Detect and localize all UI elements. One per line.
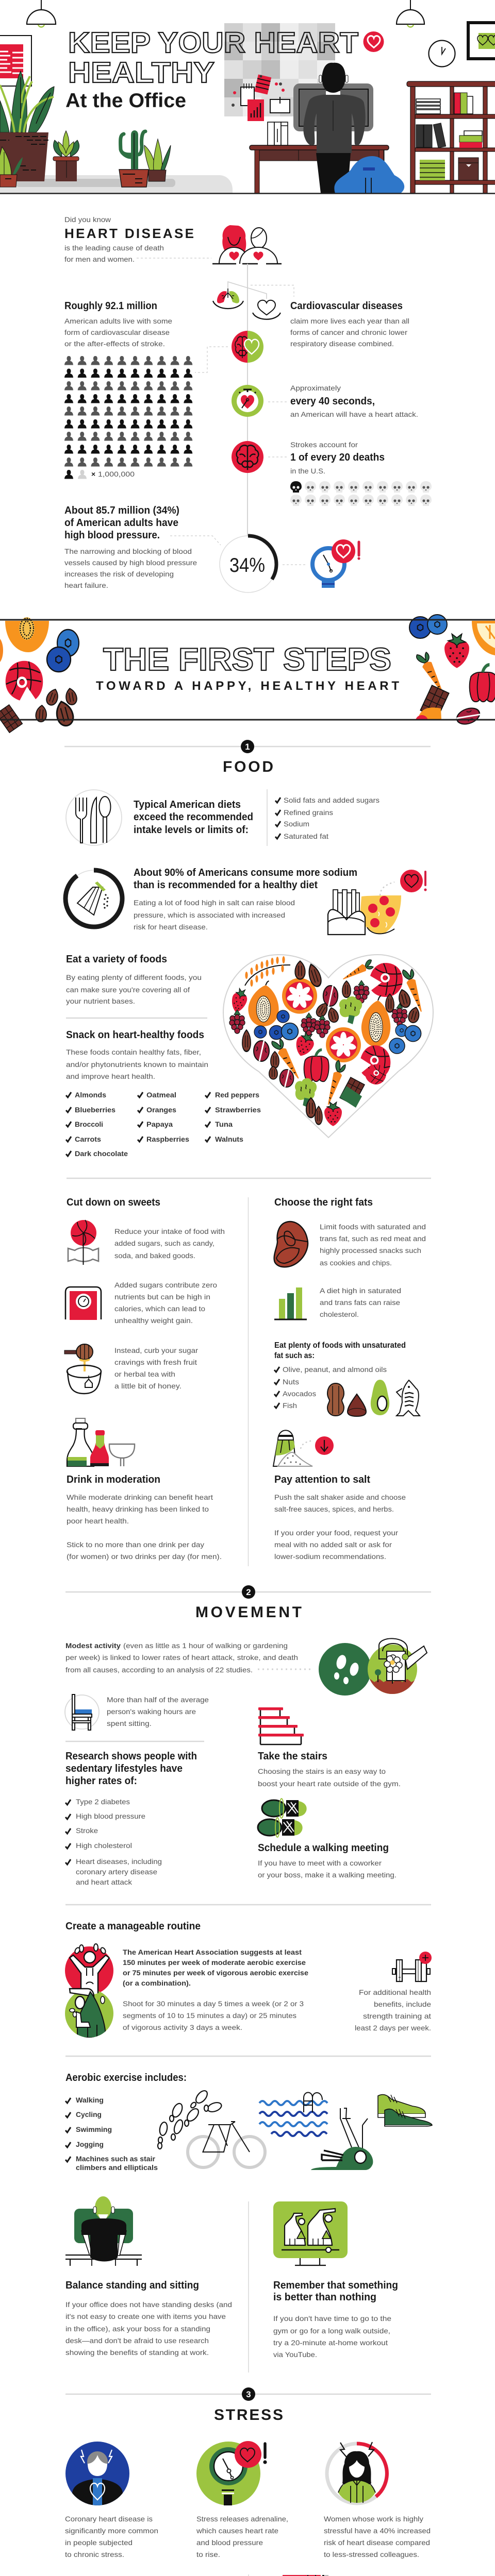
checklist: diet limits: Solid fats and added sugars bbox=[284, 796, 380, 804]
text: coronary bbox=[65, 2515, 158, 2558]
text: cut down on sweets: Cut down on sweets bbox=[67, 1197, 160, 1208]
text: walking meeting: If you have to meet with a coworker bbox=[258, 1859, 382, 1867]
text: something better than nothing: is better than nothing bbox=[273, 2292, 376, 2303]
text: walking meeting: Schedule a walking meeting bbox=[258, 1842, 389, 1854]
text: cholesterol: and trans fats can raise bbox=[320, 1298, 400, 1307]
text: adrenaline bbox=[196, 2515, 288, 2558]
icon: rising bars bbox=[274, 1287, 307, 1319]
text: coronary: in people subjected bbox=[65, 2538, 133, 2547]
text: drink in moderation: Drink in moderation bbox=[67, 1474, 160, 1485]
text: strokes bbox=[290, 440, 385, 475]
icon: running shoes bbox=[258, 1799, 307, 1837]
text: 90% sodium: risk for heart disease. bbox=[134, 923, 208, 931]
text: take the stairs: Choosing the stairs is an easy way to bbox=[258, 1767, 386, 1775]
text: eat a variety bbox=[66, 954, 202, 1005]
icon: sneakers bbox=[378, 2095, 432, 2126]
text: balance standing and sitting: showing the benefits of standing at work. bbox=[65, 2348, 209, 2357]
food illustrations right bbox=[409, 615, 495, 727]
icon: brain and heart circle bbox=[232, 331, 263, 363]
text: reduce intake bbox=[114, 1227, 225, 1260]
icon: salt ring 90% bbox=[65, 870, 122, 927]
checklist: snacks: Blueberries bbox=[75, 1106, 116, 1114]
icon: organ mobile bbox=[213, 282, 280, 319]
chart: 34% ring: 34% bbox=[229, 554, 265, 577]
text: every 40 seconds: Approximately bbox=[290, 384, 341, 392]
icon: couple bbox=[212, 225, 282, 264]
checklist: snacks: Strawberries bbox=[215, 1106, 261, 1114]
checklist: snacks: Oranges bbox=[146, 1106, 176, 1114]
text: strokes: 1 of every 20 deaths bbox=[290, 452, 385, 463]
section header: movement: 2 bbox=[246, 1587, 251, 1597]
checklist: snacks bbox=[66, 1091, 261, 1158]
text: pay attention to salt: Push the salt shaker aside and choose bbox=[274, 1493, 406, 1501]
text: added sugars: unhealthy weight gain. bbox=[114, 1316, 193, 1325]
icon: stressed woman ring bbox=[327, 2442, 387, 2503]
checklist: snacks: Red peppers bbox=[215, 1091, 259, 1099]
text: roughly 92.1 million: form of cardiovascular disease bbox=[64, 328, 170, 336]
text: sitting: person's waking hours are bbox=[107, 1707, 196, 1716]
text: heart association guidance: (or a combination). bbox=[123, 1979, 191, 1987]
text: strength training: For additional health bbox=[359, 1988, 431, 1996]
text: heart association guidance: segments of 10 to 15 minutes a day) or 25 minutes bbox=[123, 2011, 296, 2020]
text: limit foods bbox=[320, 1223, 426, 1267]
checklist: diet limits: Sodium bbox=[284, 820, 309, 828]
checklist: fats bbox=[274, 1365, 387, 1410]
text: every 40 seconds: an American will have a heart attack. bbox=[290, 410, 418, 418]
title bbox=[68, 26, 358, 89]
text: pay attention to salt: lower-sodium recommendations. bbox=[274, 1552, 386, 1561]
banner subtitle: TOWARD A HAPPY, HEALTHY HEART bbox=[96, 679, 399, 693]
text: curb sugar: a little bit of honey. bbox=[114, 1382, 182, 1390]
legend: 1,000,000 people: × bbox=[91, 470, 95, 478]
text: research: Research shows people with bbox=[65, 1751, 197, 1762]
title: HEALTHY bbox=[68, 56, 214, 89]
checklist: aerobic: Cycling bbox=[76, 2110, 102, 2119]
checklist: diet limits bbox=[275, 796, 380, 840]
text: walking meeting bbox=[258, 1842, 397, 1879]
text: drink in moderation: Stick to no more than one drink per day bbox=[67, 1540, 204, 1549]
text: balance standing and sitting: If your office does not have standing desks (and bbox=[65, 2300, 232, 2309]
checklist: risks: Heart diseases, including bbox=[76, 1857, 162, 1866]
large potted plant bbox=[0, 71, 54, 181]
text: 85.7 million: increases the risk of developing bbox=[64, 570, 174, 578]
text: curb sugar: or herbal tea with bbox=[114, 1370, 175, 1378]
checklist: snacks: Dark chocolate bbox=[75, 1149, 128, 1158]
text: something better than nothing: If you don't have time to go to the bbox=[273, 2314, 391, 2323]
text: pay attention to salt: Pay attention to salt bbox=[274, 1474, 370, 1485]
text: limit foods: Limit foods with saturated and bbox=[320, 1223, 426, 1231]
banner: the first steps bbox=[0, 615, 495, 733]
text: added sugars: nutrients but can be high in bbox=[114, 1293, 210, 1301]
text: cardiovascular diseases: respiratory disease combined. bbox=[290, 340, 394, 348]
text: walking meeting: or your boss, make it a walking meeting. bbox=[258, 1871, 397, 1879]
section header: stress: STRESS bbox=[214, 2406, 283, 2424]
icon: swimming pool bbox=[259, 2093, 327, 2136]
text: modest activity: (even as little as 1 hour of walking or gardening bbox=[123, 1641, 288, 1650]
computer monitor bbox=[293, 83, 373, 131]
text: added sugars bbox=[114, 1281, 217, 1325]
food illustrations left bbox=[0, 617, 79, 733]
banner rules bbox=[0, 620, 495, 720]
checklist: fats: Olive, peanut, and almond oils bbox=[283, 1365, 387, 1374]
text: women: risk of heart disease compared bbox=[324, 2538, 430, 2547]
text: pay attention to salt: meal with no added salt or ask for bbox=[274, 1540, 392, 1549]
text: reduce intake: Reduce your intake of food with bbox=[114, 1227, 225, 1235]
text: roughly 92.1 million bbox=[64, 300, 172, 348]
text: women bbox=[324, 2515, 431, 2558]
text: unsaturated fat bbox=[274, 1341, 406, 1360]
text: pay attention to salt bbox=[274, 1474, 406, 1561]
icon: bicycle bbox=[188, 2122, 265, 2167]
wall art left bbox=[0, 36, 31, 86]
text: balance standing and sitting: in the office), ask your boss for a standing bbox=[65, 2325, 210, 2333]
text: heart association guidance: of vigorous activity 3 days a week. bbox=[123, 2023, 242, 2031]
text: reduce intake: soda, and baked goods. bbox=[114, 1251, 195, 1260]
text: something better than nothing: try a 20-minute at-home workout bbox=[273, 2338, 388, 2347]
subtitle: At the Office bbox=[65, 90, 186, 112]
text: coronary: Coronary heart disease is bbox=[65, 2515, 153, 2523]
text: cardiovascular diseases: forms of cancer and chronic lower bbox=[290, 328, 407, 336]
text: adrenaline: Stress releases adrenaline, bbox=[196, 2515, 288, 2523]
text: 85.7 million bbox=[64, 505, 197, 589]
checklist: diet limits: Refined grains bbox=[284, 808, 333, 817]
text: cholesterol bbox=[320, 1286, 401, 1318]
central timeline bbox=[247, 264, 248, 536]
icon: salt shaker bbox=[273, 1430, 334, 1466]
text: strength training: strength training at bbox=[363, 2012, 431, 2020]
text: drink in moderation: (for women) or two drinks per day (for men). bbox=[67, 1552, 222, 1561]
desk bbox=[250, 145, 389, 193]
clock bbox=[429, 40, 455, 67]
checklist: aerobic: Swimming bbox=[76, 2125, 112, 2133]
icon: dumbbell bbox=[392, 1952, 432, 1981]
icon: fries and pizza bbox=[328, 870, 427, 935]
text: sitting bbox=[107, 1696, 209, 1727]
text: balance standing and sitting: it's not easy to create one with items you have bbox=[65, 2312, 226, 2320]
text: eat a variety: By eating plenty of different foods, you bbox=[66, 973, 202, 981]
checklist: risks: coronary artery disease bbox=[76, 1868, 157, 1876]
text: limit foods: as cookies and chips. bbox=[320, 1259, 392, 1267]
icon: scale bbox=[65, 1287, 101, 1320]
text: cardiovascular diseases: Cardiovascular diseases bbox=[290, 300, 403, 312]
icon: footprints circle bbox=[319, 1643, 371, 1696]
checklist: risks: Type 2 diabetes bbox=[76, 1798, 130, 1806]
text: modest activity: Modest activity bbox=[65, 1641, 121, 1650]
text: reduce intake: added sugars, such as candy, bbox=[114, 1239, 214, 1247]
text: adrenaline: which causes heart rate bbox=[196, 2527, 278, 2535]
text: curb sugar: Instead, curb your sugar bbox=[114, 1346, 198, 1354]
text: drink in moderation: While moderate drinking can benefit heart bbox=[67, 1493, 213, 1501]
heading: routine: Create a manageable routine bbox=[65, 1921, 201, 1932]
heading: aerobic: Aerobic exercise includes: bbox=[65, 2072, 187, 2083]
text: curb sugar: cravings with fresh fruit bbox=[114, 1358, 197, 1366]
text: modest activity: from all causes, according to an analysis of 22 studies. bbox=[65, 1666, 253, 1674]
pictogram: skulls bbox=[290, 481, 432, 506]
checklist: snacks: Tuna bbox=[215, 1120, 233, 1128]
icon: cutlery circle bbox=[66, 790, 122, 845]
text: 90% sodium: About 90% of Americans consume more sodium bbox=[134, 867, 357, 878]
text: added sugars: Added sugars contribute zero bbox=[114, 1281, 217, 1289]
checklist: fats: Avocados bbox=[283, 1389, 316, 1398]
text: cardiovascular diseases bbox=[290, 300, 409, 348]
text: heart association guidance: 150 minutes per week of moderate aerobic exercise bbox=[123, 1958, 306, 1967]
text: drink in moderation bbox=[67, 1474, 222, 1561]
text: something better than nothing: Remember that something bbox=[273, 2280, 398, 2291]
text: eat a variety: Eat a variety of foods bbox=[66, 954, 167, 965]
checklist: fats: Nuts bbox=[283, 1378, 299, 1386]
icon: gardening circle bbox=[368, 1638, 428, 1694]
text: 85.7 million: About 85.7 million (34%) bbox=[64, 505, 179, 516]
title: KEEP YOUR HEART bbox=[68, 26, 358, 59]
text: 85.7 million: high blood pressure. bbox=[64, 530, 160, 541]
text: added sugars: calories, which can lead to bbox=[114, 1304, 205, 1313]
text: something better than nothing: gym or go for a long walk outside, bbox=[273, 2327, 390, 2335]
icon: standing at desk bbox=[65, 2196, 142, 2266]
icon: brain circle bbox=[232, 441, 263, 473]
text: take the stairs: Take the stairs bbox=[258, 1751, 327, 1762]
text: typical american diets bbox=[134, 799, 253, 836]
text: snack on heart-healthy foods: and/or phytonutrients known to maintain bbox=[66, 1060, 208, 1069]
text: 85.7 million: The narrowing and blocking of blood bbox=[64, 547, 192, 555]
small plant on stand bbox=[53, 131, 79, 181]
text: 85.7 million: heart failure. bbox=[64, 581, 108, 589]
text: something better than nothing: via YouTube. bbox=[273, 2350, 317, 2359]
checklist: risks: Stroke bbox=[76, 1826, 98, 1835]
text: roughly 92.1 million: Roughly 92.1 million bbox=[64, 300, 157, 312]
text: coronary: to chronic stress. bbox=[65, 2550, 124, 2558]
checklist: risks: and heart attack bbox=[76, 1878, 133, 1886]
person standing at desk bbox=[303, 63, 366, 193]
text: 85.7 million: of American adults have bbox=[64, 517, 178, 529]
text: strokes: in the U.S. bbox=[290, 467, 325, 475]
text: 90% sodium: than is recommended for a healthy diet bbox=[134, 879, 318, 891]
section header: movement bbox=[65, 1585, 431, 1621]
text: pay attention to salt: salt-free sauces, spices, and herbs. bbox=[274, 1505, 394, 1513]
checklist: aerobic bbox=[65, 2096, 158, 2172]
icon: video workout screen bbox=[273, 2201, 348, 2265]
grass plant pot bbox=[144, 139, 171, 181]
checklist: snacks: Almonds bbox=[75, 1091, 106, 1099]
checklist: risks: High cholesterol bbox=[76, 1841, 132, 1850]
text: adrenaline: and blood pressure bbox=[196, 2538, 263, 2547]
illustration: office scene bbox=[0, 0, 495, 194]
checklist: snacks: Broccoli bbox=[75, 1120, 103, 1128]
text: did you know: for men and women. bbox=[64, 255, 135, 263]
text: snack on heart-healthy foods bbox=[66, 1029, 208, 1080]
banner title: THE FIRST STEPS bbox=[103, 642, 391, 677]
text: research bbox=[65, 1751, 197, 1787]
icon: exercise figures bbox=[65, 1944, 113, 2038]
section header: food: 1 bbox=[245, 742, 250, 752]
notes pinned to board bbox=[232, 74, 290, 121]
text: eat a variety: can make sure you're covering all of bbox=[66, 986, 190, 994]
text: coronary: significantly more common bbox=[65, 2527, 158, 2535]
icon: stressed man bbox=[65, 2442, 129, 2506]
text: balance standing and sitting: Balance standing and sitting bbox=[65, 2280, 199, 2291]
text: strokes: Strokes account for bbox=[290, 440, 358, 449]
icon: journal bbox=[279, 2575, 329, 2576]
ceiling lamp right bbox=[397, 0, 424, 27]
text: modest activity: per week) is linked to lower rates of heart attack, stroke, and death bbox=[65, 1653, 298, 1662]
text: snack on heart-healthy foods: and improve heart health. bbox=[66, 1072, 155, 1080]
text: balance standing and sitting bbox=[65, 2280, 232, 2357]
rug on floor bbox=[0, 175, 233, 193]
text: choose the right fats: Choose the right fats bbox=[274, 1197, 373, 1208]
pictogram: people grid bbox=[64, 356, 192, 467]
text: roughly 92.1 million: or the after-effects of stroke. bbox=[64, 340, 165, 348]
connector dashes bbox=[137, 258, 306, 565]
text: strength training: least 2 days per week. bbox=[355, 2024, 431, 2032]
icon: honey and tea bbox=[64, 1344, 101, 1394]
text: unsaturated fat: fat such as: bbox=[274, 1351, 315, 1360]
text: did you know bbox=[64, 215, 194, 263]
text: research: sedentary lifestyles have bbox=[65, 1763, 183, 1774]
text: balance standing and sitting: desk—and don't be afraid to use research bbox=[65, 2336, 209, 2345]
icon: chair bbox=[65, 1694, 99, 1730]
text: cholesterol: A diet high in saturated bbox=[320, 1286, 401, 1295]
icon: steak bbox=[274, 1222, 308, 1267]
text: sitting: More than half of the average bbox=[107, 1696, 209, 1704]
wall art right bbox=[468, 23, 495, 59]
text: heart association guidance: Shoot for 30 minutes a day 5 times a week (or 2 or 3 bbox=[123, 1999, 304, 2008]
text: typical american diets: exceed the recommended bbox=[134, 811, 253, 823]
checklist: snacks: Carrots bbox=[75, 1135, 101, 1143]
text: take the stairs: boost your heart rate outside of the gym. bbox=[258, 1780, 401, 1788]
text: women: Women whose work is highly bbox=[324, 2515, 423, 2523]
icon: bottles and glass bbox=[67, 1418, 135, 1466]
text: adrenaline: to rise. bbox=[196, 2550, 220, 2558]
checklist: fats: Fish bbox=[283, 1401, 297, 1410]
text: curb sugar bbox=[114, 1346, 198, 1390]
text: unsaturated fat: Eat plenty of foods with unsaturated bbox=[274, 1341, 406, 1350]
icon: stopwatch heart bbox=[232, 385, 263, 417]
legend: 1,000,000 people bbox=[64, 470, 135, 479]
text: research: higher rates of: bbox=[65, 1775, 137, 1787]
text: heart association guidance bbox=[123, 1948, 308, 2031]
text: roughly 92.1 million: American adults live with some bbox=[64, 317, 172, 325]
text: snack on heart-healthy foods: These foods contain healthy fats, fiber, bbox=[66, 1048, 201, 1056]
section header: movement: MOVEMENT bbox=[195, 1604, 302, 1621]
text: 90% sodium bbox=[134, 867, 357, 931]
text: 90% sodium: Eating a lot of food high in salt can raise blood bbox=[134, 899, 295, 907]
text: women: stressful have a 40% increased bbox=[324, 2527, 431, 2535]
text: strength training bbox=[355, 1988, 431, 2032]
chart: 34% ring bbox=[220, 536, 276, 592]
section header: food: FOOD bbox=[223, 758, 273, 775]
checklist: diet limits: Saturated fat bbox=[284, 832, 328, 840]
text: limit foods: highly processed snacks such bbox=[320, 1246, 421, 1255]
checklist: risks: High blood pressure bbox=[76, 1812, 145, 1820]
legend: 1,000,000 people: 1,000,000 bbox=[98, 470, 135, 478]
text: drink in moderation: poor heart health. bbox=[67, 1517, 129, 1525]
icons: peanut, almond, avocado, fish bbox=[327, 1380, 420, 1416]
text: every 40 seconds: every 40 seconds, bbox=[290, 396, 375, 407]
text: every 40 seconds bbox=[290, 384, 418, 418]
text: cholesterol: cholesterol. bbox=[320, 1310, 359, 1318]
checklist: risks bbox=[65, 1798, 162, 1886]
section header: stress: 3 bbox=[246, 2389, 251, 2399]
checklist: snacks: Papaya bbox=[146, 1120, 173, 1128]
icon: elliptical machine bbox=[311, 2108, 373, 2170]
text: pay attention to salt: If you order your food, request your bbox=[274, 1529, 398, 1537]
checklist: aerobic: Machines such as stair bbox=[76, 2155, 156, 2163]
text: strength training: benefits, include bbox=[374, 2000, 431, 2008]
checklist: aerobic: Jogging bbox=[76, 2140, 104, 2148]
icon: lollipop and candy bbox=[68, 1220, 98, 1265]
checklist: aerobic: climbers and ellipticals bbox=[76, 2163, 158, 2172]
text: cardiovascular diseases: claim more lives each year than all bbox=[290, 317, 409, 325]
text: did you know: is the leading cause of death bbox=[64, 244, 164, 252]
icon: heart badge bbox=[363, 31, 384, 52]
text: heart association guidance: or 75 minutes per week of vigorous aerobic exercise bbox=[123, 1969, 308, 1977]
text: eat a variety: your nutrient bases. bbox=[66, 997, 135, 1005]
text: 85.7 million: vessels caused by high blood pressure bbox=[64, 558, 197, 567]
text: drink in moderation: health, heavy drinking has been linked to bbox=[67, 1505, 209, 1513]
text: did you know: Did you know bbox=[64, 215, 111, 224]
text: typical american diets: Typical American diets bbox=[134, 799, 241, 810]
icon: stress gauge bbox=[196, 2441, 267, 2505]
bookshelf bbox=[407, 81, 495, 193]
checklist: snacks: Oatmeal bbox=[146, 1091, 176, 1099]
text: something better than nothing bbox=[273, 2280, 398, 2359]
floor line bbox=[0, 193, 495, 194]
text: women: to less-stressed colleagues. bbox=[324, 2550, 419, 2558]
checklist: snacks: Walnuts bbox=[215, 1135, 243, 1143]
blue office chair bbox=[334, 156, 404, 193]
text: 90% sodium: pressure, which is associated with increased bbox=[134, 911, 285, 919]
small plant in front of pot bbox=[0, 147, 23, 187]
text: limit foods: trans fat, such as red meat and bbox=[320, 1234, 426, 1243]
pinboard checker bbox=[224, 23, 335, 116]
text: modest activity bbox=[65, 1641, 298, 1674]
icon: footprints trail bbox=[158, 2089, 223, 2149]
text: did you know: HEART DISEASE bbox=[64, 226, 194, 241]
cactus pot bbox=[119, 130, 148, 187]
icon: blood pressure gauge bbox=[312, 539, 360, 588]
checklist: aerobic: Walking bbox=[76, 2096, 104, 2104]
text: snack on heart-healthy foods: Snack on heart-healthy foods bbox=[66, 1029, 204, 1041]
binders on desk bbox=[268, 122, 288, 145]
ceiling lamp left bbox=[27, 0, 56, 27]
section header: food bbox=[64, 740, 431, 775]
illustration: heart of healthy foods bbox=[223, 955, 433, 1138]
icon: stairs bbox=[258, 1707, 304, 1744]
text: typical american diets: intake levels or limits of: bbox=[134, 824, 249, 836]
text: take the stairs bbox=[258, 1751, 401, 1788]
section header: stress bbox=[65, 2387, 431, 2424]
text: heart association guidance: The American Heart Association suggests at least bbox=[123, 1948, 302, 1956]
text: sitting: spent sitting. bbox=[107, 1719, 152, 1727]
checklist: snacks: Raspberries bbox=[146, 1135, 189, 1143]
